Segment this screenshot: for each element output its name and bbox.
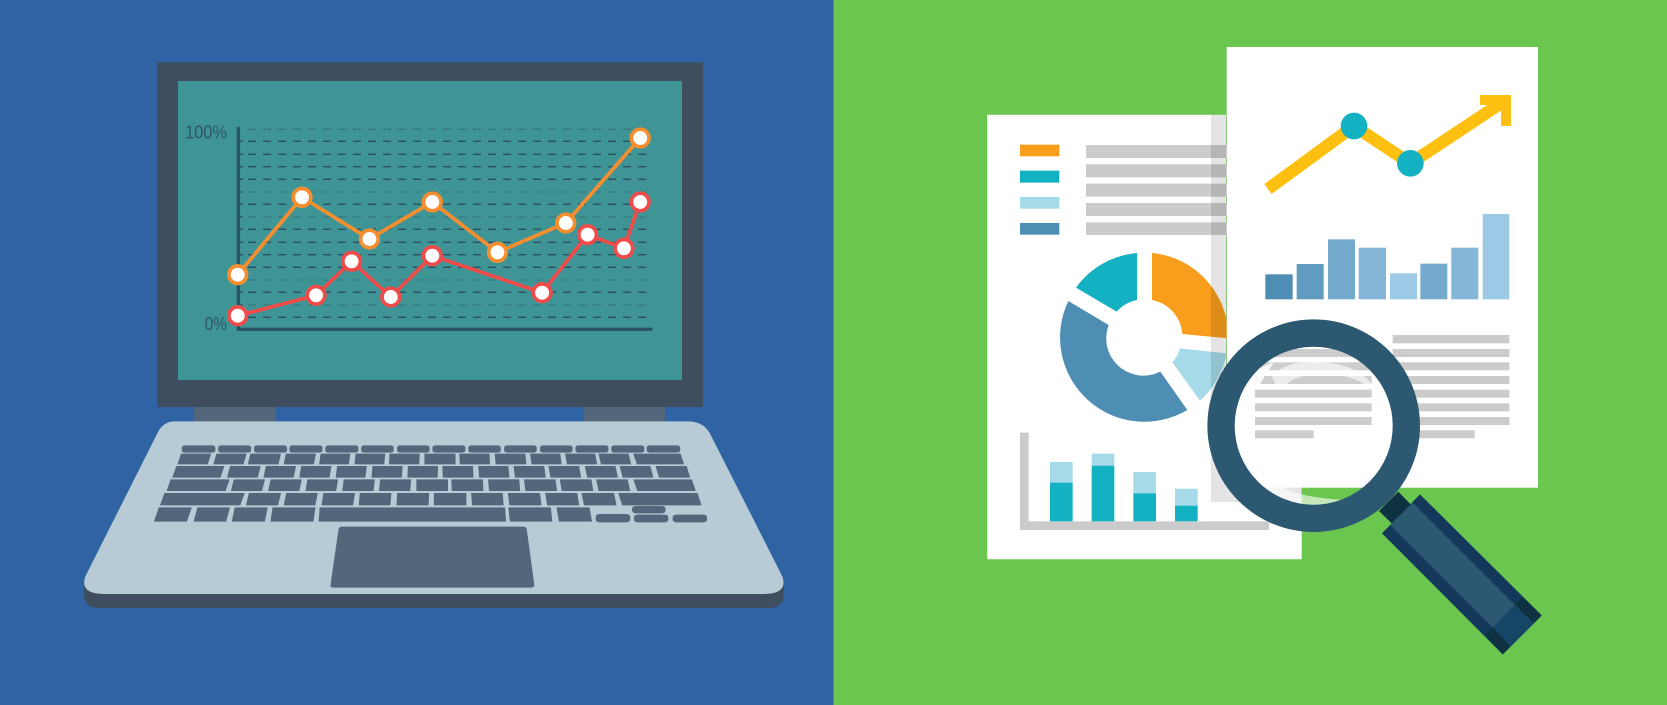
handle highlight bbox=[1390, 503, 1515, 627]
text lines left column bbox=[1255, 349, 1372, 438]
handle end cap bbox=[1493, 605, 1534, 647]
laptop screen bezel bbox=[157, 62, 703, 407]
orange line bbox=[238, 138, 640, 275]
trend line bbox=[1268, 102, 1503, 189]
chart axes bbox=[238, 128, 651, 329]
page shadow strip bbox=[1211, 115, 1302, 502]
axis label 0%: 0% bbox=[205, 314, 227, 334]
right report page bbox=[1227, 47, 1538, 488]
base deck bbox=[84, 421, 784, 594]
keyboard bbox=[154, 446, 707, 522]
donut chart bbox=[1060, 253, 1228, 422]
donut segment light blue bbox=[1172, 348, 1227, 401]
home key row bbox=[167, 480, 695, 491]
laptop screen bbox=[178, 81, 682, 380]
laptop base bbox=[84, 421, 784, 608]
bottom reflection bbox=[1266, 488, 1342, 505]
stacked bar chart bbox=[1020, 433, 1269, 530]
axis label 100%: 100% bbox=[185, 122, 227, 142]
lens ring bbox=[1221, 333, 1406, 518]
function key row bbox=[182, 446, 680, 452]
blue bar chart bbox=[1265, 214, 1509, 299]
handle bbox=[1382, 494, 1542, 654]
handle body bbox=[1382, 494, 1542, 654]
bottom letter key row bbox=[161, 493, 701, 505]
icon: magnifying glass bbox=[1221, 333, 1542, 654]
panel: blue background bbox=[0, 0, 834, 705]
red data series bbox=[229, 193, 649, 325]
red line bbox=[238, 202, 640, 316]
chart gridlines bbox=[239, 129, 650, 317]
legend swatches bbox=[1020, 145, 1059, 235]
orange data series bbox=[229, 129, 649, 284]
donut segment teal bbox=[1076, 253, 1137, 312]
donut segment orange bbox=[1152, 253, 1228, 338]
orange points bbox=[229, 129, 649, 284]
donut segment blue bbox=[1060, 301, 1187, 422]
text lines right column bbox=[1393, 335, 1509, 438]
handle end edges bbox=[1485, 596, 1542, 654]
red points bbox=[229, 193, 649, 325]
left report page bbox=[987, 115, 1302, 559]
trend line with arrow bbox=[1268, 95, 1511, 189]
illustration: report documents bbox=[987, 47, 1538, 559]
trackpad bbox=[330, 527, 534, 588]
stacked bars light bbox=[1050, 454, 1198, 506]
top reflection bbox=[1253, 362, 1372, 385]
arrow head bbox=[1480, 95, 1511, 126]
number key row bbox=[178, 454, 683, 464]
lens reflections bbox=[1255, 362, 1372, 505]
illustration: laptop bbox=[84, 62, 784, 608]
legend text bars bbox=[1086, 145, 1229, 235]
handle neck bbox=[1379, 492, 1411, 523]
trend points bbox=[1341, 113, 1424, 177]
top letter key row bbox=[173, 466, 690, 477]
space bar row bbox=[154, 508, 591, 521]
arrow keys bbox=[596, 506, 707, 522]
base shadow edge bbox=[84, 582, 784, 608]
stacked bars teal bbox=[1050, 466, 1198, 521]
stacked chart axes bbox=[1020, 433, 1269, 530]
line chart bbox=[185, 122, 651, 334]
panel: green background bbox=[834, 0, 1667, 705]
laptop hinges bbox=[194, 407, 665, 422]
